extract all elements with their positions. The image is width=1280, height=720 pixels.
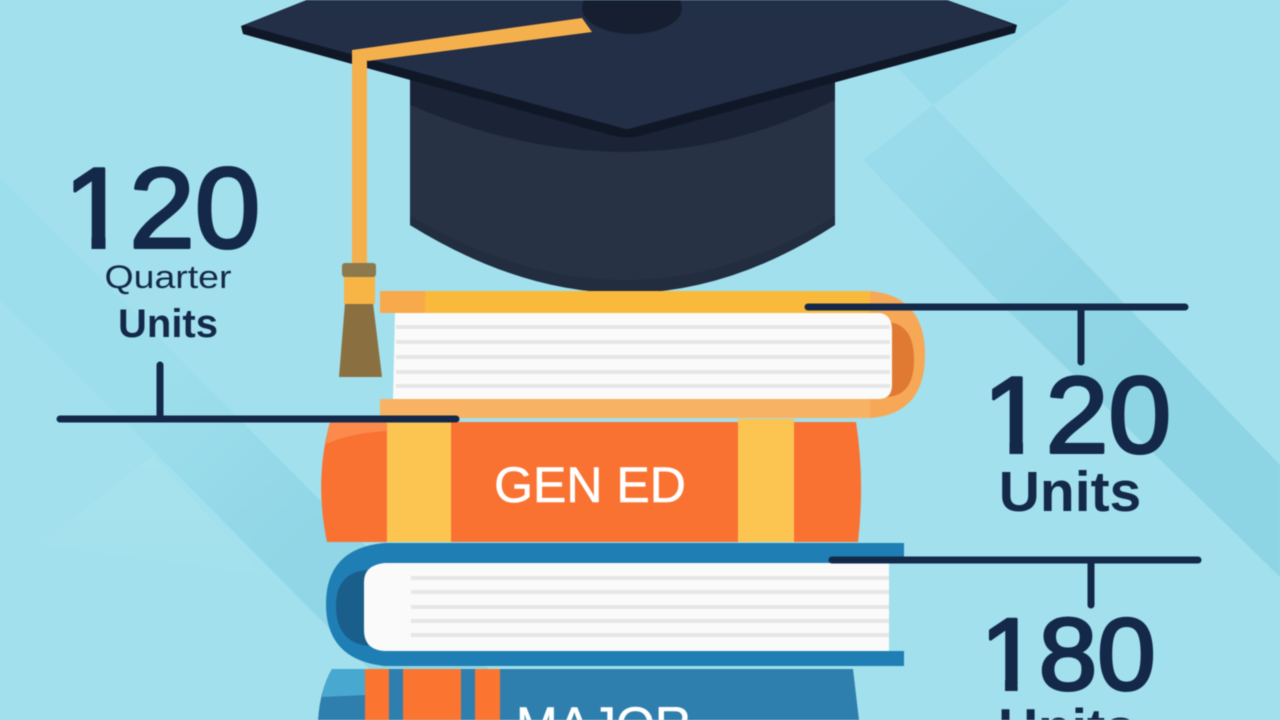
blue book cover (326, 543, 904, 666)
top book pages (393, 313, 892, 399)
graduation cap (241, 0, 1017, 377)
cap crown (410, 70, 835, 293)
callout: 120 quarter units (60, 144, 456, 419)
blue book spine inside (336, 570, 368, 646)
blue book pages (364, 563, 889, 651)
cap board (241, 0, 1017, 138)
number 120: 120 (983, 353, 1171, 476)
cap button (582, 0, 682, 34)
major cover (318, 669, 859, 720)
bracket line (808, 307, 1185, 362)
major straps (365, 669, 500, 720)
major book (318, 669, 859, 720)
gen ed straps (387, 419, 794, 542)
blue book (326, 543, 904, 666)
gen ed book (321, 419, 861, 542)
top book cover (380, 291, 925, 418)
callout: 120 units (808, 307, 1185, 524)
label quarter: Quarter (105, 260, 232, 295)
bracket line (60, 365, 456, 419)
bracket line (832, 560, 1198, 605)
number 120: 120 (64, 144, 260, 272)
label units: Units (999, 460, 1141, 524)
tassel cord (352, 50, 367, 266)
top book spine inside (885, 322, 914, 397)
gen ed cover (321, 422, 861, 542)
gen ed label: GEN ED (494, 457, 686, 513)
number 180: 180 (980, 597, 1156, 711)
top book (380, 291, 925, 418)
label units: Units (118, 302, 218, 346)
callout: 180 units (832, 560, 1198, 720)
tassel (339, 263, 382, 377)
tassel cord on board (352, 18, 592, 61)
